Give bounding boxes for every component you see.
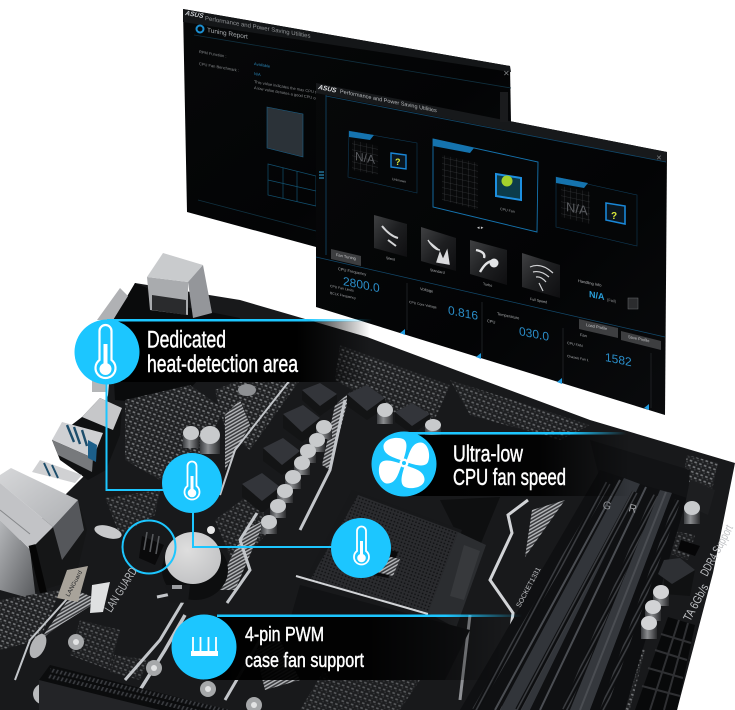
callout band — [404, 435, 630, 496]
fan mode tile: full speed: Full Speed — [530, 297, 547, 304]
panel: front software window — [316, 83, 667, 415]
status: cpu frequency: CPU Fan Limits — [330, 284, 354, 293]
button: fan tuning — [331, 249, 361, 266]
fan mode tile: silent: Silent — [386, 256, 395, 262]
status: fan: CPU FAN — [567, 341, 583, 348]
fan mode tile: turbo: Turbo — [483, 282, 492, 288]
LAN GUARD silk label: LAN GUARD — [102, 565, 140, 615]
side tab icon — [319, 172, 324, 178]
callout: dedicated heat-detection area — [74, 319, 372, 547]
button: fan tuning: Fan Tuning — [336, 252, 356, 261]
front window title: Performance and Power Saving Utilities — [340, 89, 437, 114]
report thumbnail — [267, 107, 303, 157]
heading: heat-detection area: heat-detection area — [147, 351, 298, 378]
status: voltage: Voltage — [420, 286, 434, 294]
RAM latches — [590, 440, 690, 505]
close button back window: ✕ — [503, 69, 510, 78]
crystal and LANGuard chip: LANGuard — [65, 570, 84, 598]
status: voltage: CPU Core Voltage — [409, 300, 437, 310]
status: cpu frequency: BCLK Frequency — [330, 291, 356, 300]
socket label: SOCKET1331 — [516, 566, 543, 609]
window scrollbar — [500, 92, 508, 122]
report labels: CPU Fan Benchmark : — [199, 61, 239, 73]
component clusters — [0, 345, 718, 710]
fan header highlight — [122, 520, 176, 574]
icon: socket thermometer — [331, 518, 391, 578]
status dividers — [407, 283, 651, 408]
tuning report icon — [196, 26, 204, 32]
front window logo: ASUS — [317, 84, 338, 95]
callout: ultra-low CPU fan speed — [372, 432, 630, 496]
fan panel: right — [556, 177, 637, 246]
panel: back software window — [183, 9, 511, 247]
fan panel: left — [348, 131, 417, 193]
report labels: N/A — [254, 71, 261, 77]
status: fan — [567, 332, 649, 410]
status: fan: Fan — [580, 332, 587, 338]
heading: 4-pin PWM: 4-pin PWM — [245, 624, 324, 646]
icon: mid thermometer — [162, 453, 222, 513]
icon: 4-pin header — [172, 614, 236, 680]
status: cpu frequency — [330, 266, 405, 335]
status: cpu frequency: 2800.0 — [343, 274, 380, 295]
report labels: Available — [254, 61, 271, 69]
button: load profile — [579, 319, 618, 338]
readout: N/A benchmark: N/A — [589, 289, 605, 302]
callout band — [204, 617, 504, 680]
fan panel: left: N/A — [355, 149, 376, 167]
board base — [0, 283, 735, 710]
capacitors — [33, 384, 700, 705]
SATA silk label: TA 6Gb/s — [680, 582, 711, 623]
CPU socket — [290, 490, 543, 680]
fan panel: centre: CPU Fan — [500, 207, 515, 214]
button: load profile: Load Profile — [586, 322, 608, 331]
status: fan: 1582 — [605, 350, 632, 369]
rear connector block — [92, 253, 240, 405]
button: save profile: Save Profile — [628, 334, 650, 343]
heading: dedicated: Dedicated — [147, 326, 226, 354]
chokes — [242, 383, 715, 596]
RAM slots — [460, 470, 687, 710]
status: temperature: CPU — [487, 318, 495, 325]
fan panel: left: ? — [395, 157, 400, 167]
fan panel: right: N/A — [566, 199, 588, 218]
tuning report heading: Tuning Report — [207, 27, 248, 41]
fan panel: right: ? — [611, 211, 617, 222]
report labels — [199, 49, 340, 105]
RAM slots: R — [627, 502, 638, 516]
heading: ultra-low: Ultra-low — [453, 440, 523, 466]
slot labels: G — [601, 499, 612, 513]
USB and LAN connectors — [0, 398, 122, 600]
top rule — [217, 614, 522, 617]
status: voltage — [409, 286, 481, 359]
fan mode tile: full speed — [522, 253, 560, 304]
top rule — [404, 432, 626, 434]
report table — [268, 164, 316, 206]
fan mode tile: standard: Standard — [430, 268, 445, 275]
pager arrows: ◂ ▸ — [477, 225, 484, 231]
silkscreen traces — [15, 380, 528, 710]
status: fan: Chassis Fan 1 — [567, 354, 589, 362]
status: temperature: Temperature — [497, 311, 520, 321]
report labels: This value indicates the max CPU temperature — [254, 79, 337, 98]
back window logo: ASUS — [184, 10, 205, 20]
fan mode tile: standard — [421, 227, 456, 275]
close button front window: ✕ — [656, 155, 662, 162]
heading: CPU fan speed: CPU fan speed — [453, 464, 566, 490]
status: cpu frequency: CPU Frequency — [338, 266, 366, 277]
readout: N/A benchmark: (Fail) — [607, 297, 617, 304]
status: temperature: 030.0 — [519, 324, 549, 344]
icon: fan — [372, 432, 436, 496]
fan mode tile: turbo — [470, 240, 507, 288]
callout: 4-pin PWM case fan support — [172, 614, 522, 680]
back window title: Performance and Power Saving Utilities — [205, 16, 311, 40]
readout: N/A benchmark: Handling Info — [578, 278, 602, 288]
fan panel: centre — [433, 139, 538, 232]
CMOS battery — [162, 532, 228, 603]
fan panel: left: Unknown — [392, 177, 406, 184]
callout band — [107, 321, 370, 382]
report labels: A low value denotes a good CPU cooling system — [254, 85, 340, 105]
heading: case fan support: case fan support — [245, 650, 364, 672]
report labels: RPM Function : — [199, 49, 226, 59]
PCIe slot — [39, 665, 250, 710]
hatched copper areas — [40, 392, 565, 690]
status: temperature — [487, 311, 562, 384]
readout: N/A benchmark — [578, 278, 638, 309]
fan mode tile: silent — [374, 215, 407, 262]
motherboard — [0, 253, 735, 710]
window lines — [316, 95, 666, 337]
ATX connector — [635, 617, 695, 710]
crystal and LANGuard chip — [26, 523, 262, 710]
connector line — [106, 380, 335, 547]
button: save profile — [621, 331, 661, 350]
icon: large thermometer — [74, 320, 140, 384]
status: voltage: 0.816 — [448, 303, 478, 323]
top rule — [107, 319, 372, 322]
